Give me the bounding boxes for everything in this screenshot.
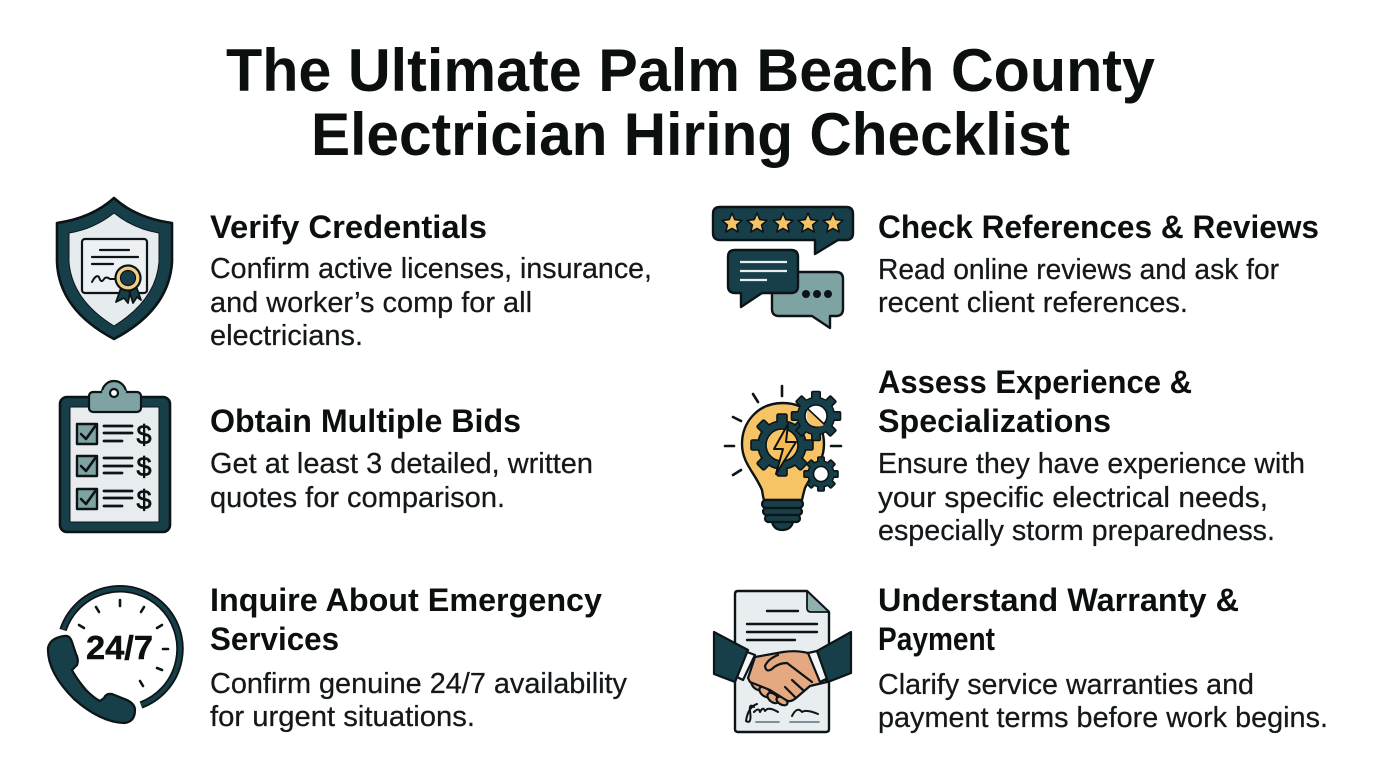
text: references description: recent client references. bbox=[878, 287, 1188, 319]
text: references description bbox=[878, 254, 1279, 319]
text: experience description bbox=[878, 448, 1305, 547]
title bbox=[226, 37, 1156, 168]
text: experience description: Ensure they have experience with bbox=[878, 448, 1305, 480]
title: Electrician Hiring Checklist bbox=[311, 101, 1070, 168]
heading: inquire about emergency services bbox=[210, 582, 602, 657]
heading: inquire about emergency services: Services bbox=[210, 621, 339, 657]
panel: assess experience and specializations bbox=[725, 364, 1305, 547]
panel: obtain multiple bids bbox=[60, 381, 593, 532]
heading: assess experience and specializations: Specializations bbox=[878, 403, 1111, 439]
text: warranty description: payment terms before work begins. bbox=[878, 702, 1328, 734]
text: obtain multiple bids description: Get at least 3 detailed, written bbox=[210, 448, 593, 480]
heading: obtain multiple bids: Obtain Multiple Bids bbox=[210, 403, 521, 439]
text: verify credentials description: and worker’s comp for all bbox=[210, 287, 532, 319]
icon: clipboard checklist: $ bbox=[136, 420, 152, 450]
icon: clipboard checklist: $ bbox=[136, 452, 152, 482]
text: obtain multiple bids description bbox=[210, 448, 593, 514]
icon: star rating and speech bubbles bbox=[713, 207, 853, 328]
panel: inquire about emergency services bbox=[48, 582, 627, 733]
text: references description: Read online reviews and ask for bbox=[878, 254, 1279, 286]
icon: 24/7 clock and phone: 24/7 bbox=[86, 629, 153, 666]
panel: understand warranty and payment bbox=[714, 582, 1328, 734]
panel: verify credentials bbox=[57, 198, 652, 352]
heading: understand warranty and payment: Understand Warranty & bbox=[878, 582, 1239, 618]
heading: assess experience and specializations: Assess Experience & bbox=[878, 364, 1192, 400]
text: emergency services description: for urgent situations. bbox=[210, 701, 475, 733]
heading: verify credentials: Verify Credentials bbox=[210, 209, 487, 245]
panel: check references and reviews bbox=[713, 207, 1319, 328]
icon: 24/7 clock and phone bbox=[48, 589, 180, 723]
icon: light bulb with gears bbox=[725, 386, 841, 530]
text: obtain multiple bids description: quotes for comparison. bbox=[210, 482, 505, 514]
icon: clipboard checklist: $ bbox=[136, 485, 152, 515]
text: warranty description bbox=[878, 669, 1328, 734]
text: experience description: especially storm preparedness. bbox=[878, 515, 1275, 547]
heading: assess experience and specializations bbox=[878, 364, 1192, 439]
icon: contract and handshake bbox=[714, 591, 851, 732]
text: experience description: your specific electrical needs, bbox=[878, 482, 1268, 514]
text: verify credentials description: Confirm active licenses, insurance, bbox=[210, 253, 652, 285]
icon: shield with certificate bbox=[57, 198, 172, 339]
heading: inquire about emergency services: Inquire About Emergency bbox=[210, 582, 602, 618]
icon: clipboard checklist bbox=[60, 381, 170, 532]
heading: check references and reviews: Check References & Reviews bbox=[878, 209, 1319, 245]
text: emergency services description bbox=[210, 668, 627, 733]
heading: understand warranty and payment bbox=[878, 582, 1239, 657]
text: verify credentials description bbox=[210, 253, 652, 352]
text: emergency services description: Confirm genuine 24/7 availability bbox=[210, 668, 627, 700]
text: warranty description: Clarify service warranties and bbox=[878, 669, 1254, 701]
heading: understand warranty and payment: Payment bbox=[878, 621, 995, 657]
title: The Ultimate Palm Beach County bbox=[226, 37, 1156, 104]
text: verify credentials description: electricians. bbox=[210, 320, 363, 352]
